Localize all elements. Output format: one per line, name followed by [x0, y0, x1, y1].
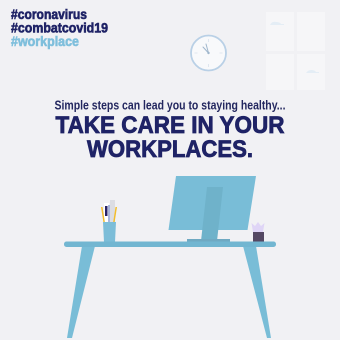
icon: desktop monitor [168, 176, 256, 242]
hashtag: combatcovid19: #combatcovid19 [11, 20, 108, 36]
desk right leg [243, 246, 271, 338]
title [56, 112, 284, 163]
desk left leg [67, 246, 95, 338]
title line 2: WORKPLACES. [87, 136, 253, 163]
desk [64, 242, 276, 338]
icon: pen cup [101, 200, 117, 242]
icon: window with clouds [266, 12, 325, 90]
title line 1: TAKE CARE IN YOUR [56, 112, 284, 139]
hashtag: coronavirus: #coronavirus [11, 7, 87, 22]
hashtag: workplace: #workplace [11, 34, 79, 49]
icon: desk plant [252, 222, 264, 242]
desk top [64, 242, 276, 247]
hashtags [11, 7, 108, 49]
subtitle: Simple steps can lead you to staying healthy... [54, 98, 286, 112]
icon: wall clock [191, 36, 226, 70]
